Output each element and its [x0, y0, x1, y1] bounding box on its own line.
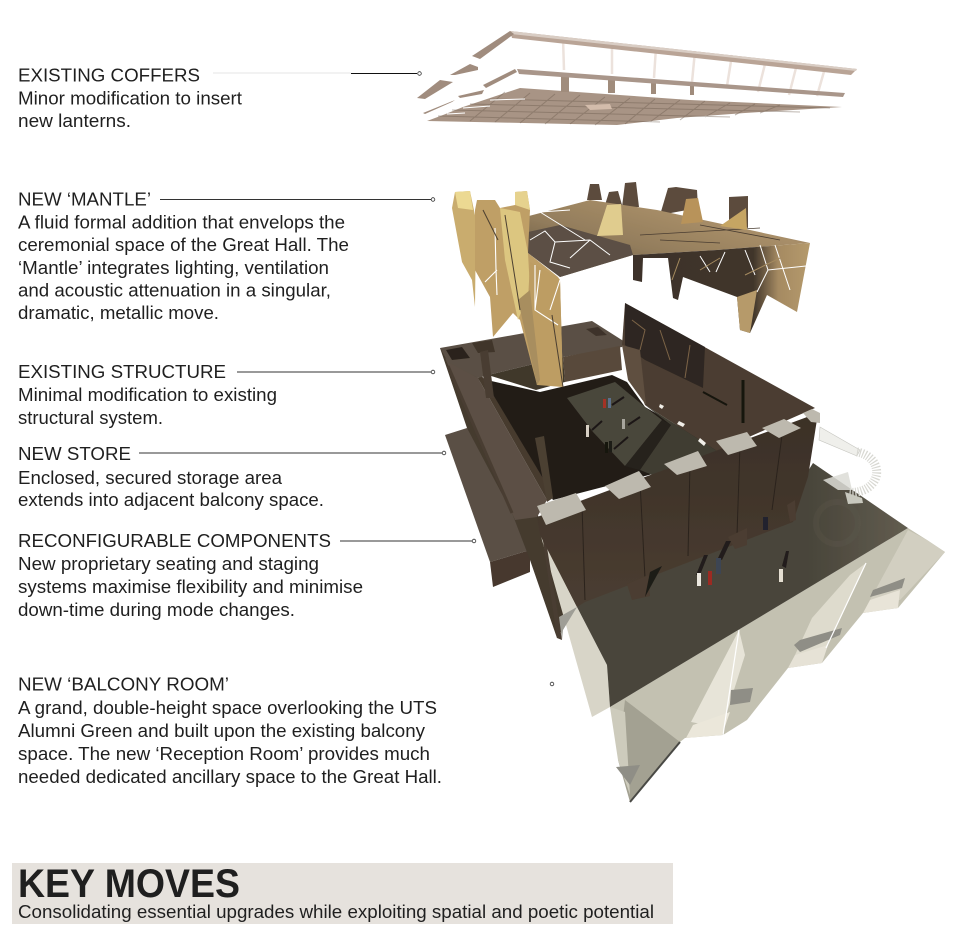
- lower coffer plate: [427, 88, 842, 125]
- shadow columns on floor: [696, 541, 789, 575]
- side glass: [540, 533, 610, 717]
- label: new store: Enclosed, secured storage area: [18, 468, 283, 488]
- label: existing structure: structural system.: [18, 408, 163, 428]
- layer: existing structure: [440, 303, 815, 638]
- left extension (new store): [445, 428, 530, 562]
- label: new balcony room: space. The new ‘Reception Room’ provides much: [18, 744, 430, 764]
- leader: existing coffers: [213, 72, 421, 75]
- label: reconfigurable components: down-time during mode changes.: [18, 600, 295, 620]
- roof white lights: [659, 404, 706, 446]
- people inside: [586, 397, 640, 453]
- label: new balcony room: Alumni Green and built upon the existing balcony: [18, 721, 425, 741]
- layer: new balcony room: [537, 409, 945, 802]
- left dashed beams: [417, 31, 517, 114]
- interior post: [535, 436, 553, 502]
- underside right: [633, 243, 810, 333]
- label: new store: extends into adjacent balcony space.: [18, 490, 324, 510]
- label: new balcony room: NEW ‘BALCONY ROOM’: [18, 674, 229, 694]
- leader: new store: [139, 451, 446, 455]
- label: existing coffers: Minor modification to insert: [18, 88, 242, 108]
- label: new store: [18, 444, 324, 510]
- leader: existing structure: [237, 370, 435, 374]
- layer: new mantle: [452, 182, 810, 387]
- label: new mantle: A fluid formal addition that envelops the: [18, 212, 345, 232]
- label: new store: NEW STORE: [18, 444, 131, 464]
- label: new balcony room: A grand, double-height space overlooking the UTS: [18, 698, 437, 718]
- label: reconfigurable components: [18, 531, 363, 620]
- label: existing coffers: [18, 66, 242, 131]
- chimneys front gold: [597, 204, 623, 236]
- label: existing structure: [18, 362, 277, 428]
- label: existing coffers: EXISTING COFFERS: [18, 66, 200, 86]
- mid beam: [517, 69, 845, 97]
- label: new mantle: NEW ‘MANTLE’: [18, 190, 151, 210]
- label: existing structure: EXISTING STRUCTURE: [18, 362, 226, 382]
- label: new mantle: and acoustic attenuation in a singular,: [18, 280, 331, 300]
- top beam: [510, 31, 857, 75]
- label: new mantle: [18, 190, 349, 323]
- columns: [563, 38, 825, 96]
- left fins: [452, 191, 476, 307]
- beam front: [563, 346, 622, 382]
- roof top: [440, 321, 625, 378]
- dark hatched front of top: [528, 225, 633, 277]
- label: reconfigurable components: New proprietary seating and staging: [18, 554, 319, 574]
- label: new balcony room: [18, 674, 442, 787]
- front wall: [537, 413, 818, 607]
- interior black floor: [478, 375, 720, 500]
- label: new mantle: ceremonial space of the Great Hall. The: [18, 235, 349, 255]
- label: new mantle: ‘Mantle’ integrates lighting, ventilation: [18, 258, 329, 278]
- layer: existing coffers: [417, 31, 857, 125]
- title band: [12, 862, 673, 924]
- roof glazing lanterns: [537, 409, 820, 525]
- left wall band: [445, 358, 547, 520]
- illustration: exploded axonometric: [417, 31, 945, 802]
- subtitle: Consolidating essential upgrades while exploiting spatial and poetic potential: [18, 902, 654, 922]
- floor stair shadow: [816, 502, 858, 544]
- label: reconfigurable components: systems maximise flexibility and minimise: [18, 577, 363, 597]
- label: new mantle: dramatic, metallic move.: [18, 303, 219, 323]
- chimneys back: [587, 182, 748, 228]
- label: reconfigurable components: RECONFIGURABLE COMPONENTS: [18, 531, 331, 551]
- floor plane: [577, 463, 908, 707]
- people on floor: [697, 517, 783, 586]
- leader: new balcony room: [550, 682, 554, 686]
- top surface: [525, 200, 810, 277]
- label: new balcony room: needed dedicated ancillary space to the Great Hall.: [18, 767, 442, 787]
- leader: new mantle: [160, 198, 435, 201]
- heading: KEY MOVES: [18, 862, 240, 906]
- stage: [567, 382, 662, 466]
- spiral stair and bridge: [819, 427, 877, 504]
- leader: reconfigurable components: [340, 539, 476, 543]
- back right wall: [622, 303, 815, 451]
- balcony lower folds: [610, 528, 945, 802]
- outer left wall: [440, 348, 577, 638]
- label: existing coffers: new lanterns.: [18, 111, 131, 131]
- label: existing structure: Minimal modification to existing: [18, 385, 277, 405]
